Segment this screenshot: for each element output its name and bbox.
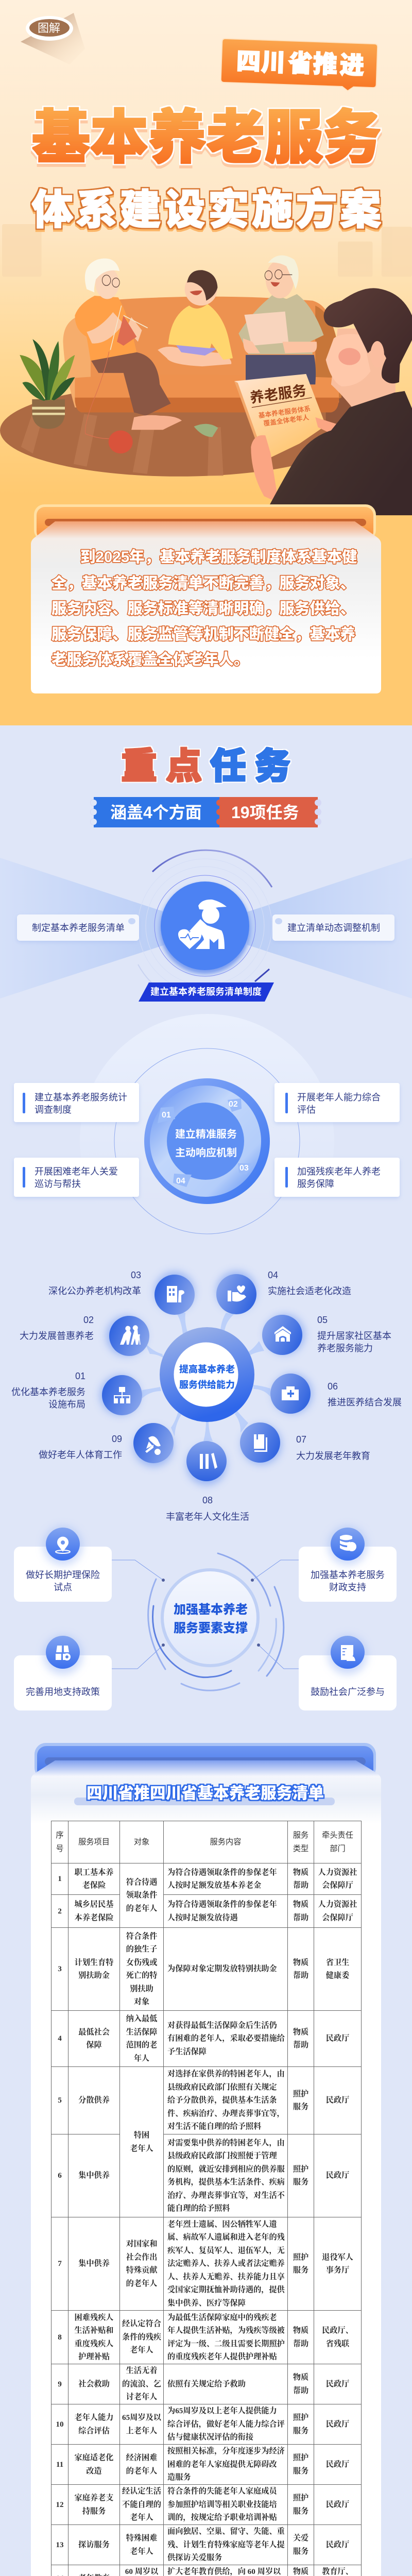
node 06: 推进医养结合发展 (328, 1397, 402, 1408)
table: 四川省基本养老服务清单: 人、扶养人无赡养、扶养能力且享 (167, 2273, 285, 2281)
node 05: 05 (317, 1315, 328, 1325)
rings (138, 850, 272, 993)
table: 四川省基本养老服务清单: 为符合待遇领取条件的参保老年 (167, 1868, 277, 1876)
table: 四川省基本养老服务清单: 对需要集中供养的特困老年人，由 (167, 2138, 285, 2147)
table: 四川省基本养老服务清单: 对生活不能自理的给予照料 (167, 2122, 261, 2131)
table: 四川省基本养老服务清单: 综合评估 (78, 2427, 110, 2435)
table: 四川省基本养老服务清单: 为最低生活保障家庭中的残疾老 (167, 2313, 277, 2321)
table: 四川省基本养老服务清单: 评定为一级、二级且需要长期照护 (167, 2339, 285, 2348)
table: 四川省基本养老服务清单: 特殊贡献 (126, 2266, 157, 2275)
table: 四川省基本养老服务清单: 民政厅 (326, 2540, 349, 2549)
node 01: 01 (75, 1371, 85, 1381)
grandmother (75, 259, 182, 438)
table: 四川省基本养老服务清单: 造服务 (167, 2473, 191, 2482)
table: 四川省基本养老服务清单: 范围的老 (126, 2041, 157, 2049)
card: 用地支持 (14, 1635, 112, 1710)
task card: 服务保障 (297, 1179, 334, 1189)
table: 四川省基本养老服务清单: 省残联 (326, 2339, 349, 2348)
table: 四川省基本养老服务清单: 物质 (293, 2326, 308, 2335)
node 05 (262, 1315, 391, 1355)
reader: man holding the booklet: 养老服务 (249, 382, 307, 406)
card: 财政支持: 财政支持 (329, 1582, 366, 1592)
table: 四川省基本养老服务清单: 服务 (293, 2266, 308, 2275)
paper (31, 521, 381, 693)
center circle (162, 1570, 258, 1666)
table: 四川省基本养老服务清单: 件、疾病治疗、办理丧葬事宜等， (167, 2109, 285, 2118)
table: 四川省基本养老服务清单: 照护 (293, 2494, 308, 2502)
panel frame (35, 1743, 376, 1779)
table: 四川省基本养老服务清单: 6 (58, 2171, 62, 2180)
table: 四川省基本养老服务清单: 对象 (134, 1838, 149, 1846)
table: 四川省基本养老服务清单: 为符合待遇领取条件的参保老年 (167, 1900, 277, 1909)
node 07: 07 (296, 1434, 306, 1445)
card: 长期护理保险 (14, 1526, 112, 1602)
table: 四川省基本养老服务清单: 物质 (293, 2567, 308, 2576)
endpoint dots (162, 1579, 260, 1647)
card: 社会参与: 鼓励社会广泛参与 (311, 1687, 385, 1697)
panel: goal statement (31, 504, 381, 693)
table: 四川省基本养老服务清单: 别扶助 (130, 1985, 153, 1993)
center circle: 服务要素支撑 (174, 1621, 248, 1635)
table: 四川省基本养老服务清单: 困难的老年人家庭提供无障碍改 (167, 2460, 277, 2469)
title: 基本养老服务: 基本养老服务 (32, 105, 381, 170)
table: 四川省基本养老服务清单: 疾军人、复员军人、退伍军人，无 (167, 2246, 285, 2255)
table: 四川省基本养老服务清单: 集中供养 (78, 2171, 110, 2180)
task card (274, 1083, 400, 1122)
table: 四川省基本养老服务清单: 65周岁及以 (122, 2413, 161, 2422)
task card (274, 1158, 400, 1197)
hub shadow (160, 884, 250, 974)
goal paragraph: 服务保障、服务监管等机制不断健全，基本养 (52, 625, 355, 643)
table: 四川省基本养老服务清单: 4 (58, 2034, 62, 2043)
table: 四川省基本养老服务清单: 10 (56, 2420, 64, 2429)
table: 四川省基本养老服务清单: 的流浪、乞 (122, 2380, 161, 2388)
right card: 建立清单动态调整机制 (287, 923, 380, 933)
table: 四川省基本养老服务清单: 服务 (293, 1831, 308, 1840)
table: 四川省基本养老服务清单: 老年烈士遗属、因公牺牲军人遗 (167, 2220, 277, 2229)
table: 四川省基本养老服务清单: 会保障厅 (322, 1881, 353, 1890)
wall squares (2, 224, 412, 277)
node 06 (270, 1374, 402, 1414)
task card: 巡访与帮扶 (35, 1179, 81, 1189)
node 02 (20, 1315, 149, 1356)
table: 四川省基本养老服务清单: 11 (56, 2460, 63, 2469)
task cards: 建立基本养老服务统计 (35, 1092, 127, 1103)
child (158, 270, 233, 366)
hero background (0, 0, 412, 725)
table: 四川省基本养老服务清单: 年人 (134, 2054, 149, 2063)
table: 四川省基本养老服务清单: 号 (56, 1844, 64, 1853)
center circle: 加强基本养老 (174, 1602, 248, 1617)
table: 四川省基本养老服务清单: 会保障厅 (322, 1913, 353, 1922)
table: 四川省基本养老服务清单: 城乡居民基 (75, 1900, 113, 1909)
table: 四川省基本养老服务清单: 符合条件 (126, 1932, 157, 1940)
table: 四川省基本养老服务清单: 物质 (293, 1868, 308, 1876)
table: 四川省基本养老服务清单: 讨老年人 (126, 2393, 157, 2401)
card: 用地支持: 完善用地支持政策 (26, 1687, 100, 1697)
table: 四川省基本养老服务清单: 受国家定期抚恤补助待遇的，提供 (167, 2285, 285, 2294)
table: 四川省基本养老服务清单: 有困难的老年人，采取必要措施给 (167, 2034, 285, 2043)
table: 四川省基本养老服务清单: 训的，按规定给予职业培训补贴 (167, 2513, 277, 2522)
outline circle (114, 1048, 300, 1234)
task card: 开展老年人能力综合 (297, 1092, 381, 1103)
table: 四川省基本养老服务清单: 省卫生 (326, 1958, 349, 1967)
table: 四川省基本养老服务清单: 综合评估，做好老年人能力综合评 (167, 2420, 285, 2429)
task card: 加强残疾老年人养老 (297, 1166, 381, 1177)
arcs (148, 1553, 284, 1690)
number tags: 04 (176, 1177, 185, 1185)
table: 四川省基本养老服务清单: 依照有关规定给予救助 (167, 2380, 246, 2388)
center hub (160, 1327, 254, 1422)
table: 四川省基本养老服务清单: 县级政府民政部门按照便于管理 (167, 2151, 277, 2160)
node 07: 大力发展老年教育 (296, 1451, 370, 1461)
table: 四川省基本养老服务清单: 家庭养老支 (75, 2494, 113, 2502)
table: 四川省基本养老服务清单: 按照相关标准，分年度逐步为经济 (167, 2447, 285, 2455)
logo: 图解 (21, 13, 85, 64)
label bar: 建立基本养老服务清单制度 (150, 986, 262, 997)
backdrop circle (80, 1014, 334, 1268)
table: 四川省基本养老服务清单: 照护 (293, 2090, 308, 2098)
node 01: 优化基本养老服务 (11, 1387, 85, 1397)
table: 四川省基本养老服务清单: 本养老保险 (75, 1913, 113, 1922)
diagram: 建立基本养老服务清单制度 (0, 850, 412, 1002)
connectors (142, 1313, 270, 1441)
node 07 (240, 1422, 370, 1463)
table: 四川省基本养老服务清单: 服务 (293, 2427, 308, 2435)
card: 财政支持: 加强基本养老服务 (311, 1570, 385, 1580)
table: 四川省基本养老服务清单: 属、病故军人遗属和进入老年的残 (167, 2233, 285, 2242)
card: 财政支持 (299, 1526, 397, 1602)
table: 四川省基本养老服务清单: 服务 (293, 2178, 308, 2187)
table: 四川省基本养老服务清单: 死亡的特 (126, 1971, 157, 1980)
table: 四川省基本养老服务清单: 符合条件的失能老年人家庭成员 (167, 2487, 277, 2496)
table: 四川省基本养老服务清单: 特困 (134, 2131, 149, 2140)
node 08: 丰富老年人文化生活 (166, 1512, 249, 1522)
node 08 (166, 1441, 249, 1522)
table: 四川省基本养老服务清单: 帮助 (293, 1913, 308, 1922)
table: 四川省基本养老服务清单: 民政厅 (326, 2460, 349, 2469)
table: 四川省基本养老服务清单: 特殊困难 (126, 2534, 157, 2543)
table: 四川省基本养老服务清单: 能自理的给予照料 (167, 2204, 230, 2213)
table: 四川省基本养老服务清单: 帮助 (293, 2386, 308, 2395)
task card: 开展困难老年人关爱 (35, 1166, 118, 1177)
table: 四川省基本养老服务清单: 人按时足额发放基本养老金 (167, 1881, 261, 1890)
card: 长期护理保险: 做好长期护理保险 (26, 1570, 100, 1580)
table: 四川省基本养老服务清单: 老年人 (130, 2547, 153, 2555)
subtitle: 体系建设实施方案: 体系建设实施方案 (32, 187, 381, 233)
heading: 重点任务: 任务 (210, 746, 290, 786)
table: 四川省基本养老服务清单: 社会作出 (126, 2252, 157, 2262)
table: 四川省基本养老服务清单: 服务 (293, 2547, 308, 2555)
disc (144, 1078, 270, 1204)
left card: 制定基本养老服务清单 (32, 923, 125, 933)
table: 四川省基本养老服务清单: 保障 (86, 2041, 102, 2049)
sofa (63, 297, 355, 427)
green slippers (194, 424, 218, 437)
table: 四川省基本养老服务清单: 民政厅 (326, 2500, 349, 2509)
card: 社会参与 (299, 1635, 397, 1710)
reader: man holding the booklet: 覆盖全体老年人 (263, 413, 310, 428)
table: 四川省基本养老服务清单: 牵头责任 (322, 1831, 353, 1840)
table: 四川省基本养老服务清单: 纳入最低 (126, 2014, 157, 2023)
table: 四川省基本养老服务清单: 服务 (293, 2467, 308, 2475)
hub circle with elder-care icon (161, 882, 249, 970)
node 04: 实施社会适老化改造 (268, 1286, 351, 1296)
table: 四川省基本养老服务清单: 家庭适老化 (75, 2453, 113, 2462)
section background (0, 725, 412, 2576)
table: 四川省基本养老服务清单: 老年人 (130, 2144, 153, 2153)
table: 四川省基本养老服务清单: 经认定符合 (122, 2319, 161, 2328)
connector lines (112, 1560, 299, 1669)
table: 四川省基本养老服务清单: 最低社会 (78, 2028, 110, 2036)
table: 四川省基本养老服务清单: 人力资源社 (318, 1868, 357, 1876)
table: 四川省基本养老服务清单: 女伤残或 (126, 1958, 157, 1967)
table: 四川省基本养老服务清单: 民政厅 (326, 2420, 349, 2429)
table: 四川省基本养老服务清单: 民政厅 (326, 2034, 349, 2043)
table: 四川省基本养老服务清单: 为保障对象定期发放特别扶助金 (167, 1964, 277, 1973)
number tags: 02 (229, 1100, 238, 1109)
table: 四川省基本养老服务清单: 老年人能力 (75, 2413, 113, 2422)
label bar (139, 982, 274, 1002)
table: 四川省基本养老服务清单: 序 (56, 1831, 64, 1840)
table: 四川省基本养老服务清单: 5 (58, 2096, 62, 2105)
list title: 四川省推四川省基本养老服务清单 (87, 1785, 324, 1802)
node 09: 09 (112, 1434, 122, 1444)
table: 四川省基本养老服务清单: 民政厅 (326, 2380, 349, 2388)
table: 四川省基本养老服务清单: 面向独居、空巢、留守、失能、重 (167, 2527, 285, 2536)
table: 四川省基本养老服务清单: 集中供养、医疗等保障 (167, 2299, 246, 2308)
table: 四川省基本养老服务清单: 服务内容 (210, 1838, 241, 1846)
table: 四川省基本养老服务清单: 探访服务 (78, 2540, 110, 2549)
rug (0, 384, 357, 477)
table: 四川省基本养老服务清单: 3 (58, 1964, 62, 1973)
reader: man holding the booklet (234, 288, 412, 515)
center hub: 服务供给能力 (179, 1379, 235, 1390)
table: 四川省基本养老服务清单: 老保险 (82, 1881, 106, 1890)
table: 四川省基本养老服务清单: 12 (56, 2500, 64, 2509)
node 03: 03 (131, 1270, 141, 1280)
table: 四川省基本养老服务清单: 残、计划生育特殊家庭等老年人提 (167, 2540, 285, 2549)
table: 四川省基本养老服务清单: 民政厅、 (322, 2326, 353, 2335)
panel frame (34, 504, 376, 540)
title bar (74, 1798, 335, 1805)
table: 四川省基本养老服务清单: 护理补贴 (78, 2352, 110, 2361)
table: 四川省基本养老服务清单: 重度残疾人 (75, 2339, 113, 2348)
table: 四川省基本养老服务清单: 关爱 (293, 2534, 308, 2543)
table: 四川省基本养老服务清单: 照护 (293, 2252, 308, 2262)
table: 四川省基本养老服务清单: 事务厅 (326, 2266, 349, 2275)
table: 四川省基本养老服务清单: 类型 (293, 1844, 308, 1853)
table: 四川省基本养老服务清单: 领取条件 (126, 1891, 157, 1900)
table: 四川省基本养老服务清单: 供探访关爱服务 (167, 2553, 222, 2562)
disc: 建立精准服务 (175, 1128, 237, 1140)
node 01: 设施布局 (48, 1399, 85, 1410)
table: 四川省基本养老服务清单: 帮助 (293, 1971, 308, 1980)
table: 四川省基本养老服务清单: 估与健康状况评估的衔接 (167, 2433, 253, 2442)
table: 四川省基本养老服务清单: 物质 (293, 2373, 308, 2382)
table: 四川省基本养老服务清单: 1 (58, 1874, 62, 1883)
table: 四川省基本养老服务清单 (51, 1821, 362, 2576)
table: 四川省基本养老服务清单: 退役军人 (322, 2252, 353, 2262)
goal paragraph: 服务内容、服务标准等清晰明确，服务供给、 (52, 600, 355, 617)
node 04: 04 (268, 1270, 278, 1280)
table: 四川省基本养老服务清单: 的独生子 (126, 1945, 157, 1954)
table: 四川省基本养老服务清单: 的老年人 (126, 2467, 157, 2475)
center hub: 提高基本养老 (179, 1364, 235, 1375)
node 01 (11, 1371, 142, 1415)
task cards: 调查制度 (35, 1105, 72, 1115)
disc: 主动响应机制 (175, 1146, 237, 1159)
table: 四川省基本养老服务清单: 的老年人 (126, 1904, 157, 1913)
table: 四川省基本养老服务清单: 的原则，就近安排到相应的供养服 (167, 2165, 285, 2173)
task cards (14, 1083, 139, 1122)
table: 四川省基本养老服务清单: 8 (58, 2333, 62, 2342)
table: 四川省基本养老服务清单: 服务项目 (78, 1838, 110, 1846)
left card (17, 914, 139, 941)
table: 四川省基本养老服务清单: 不能自理的 (122, 2500, 161, 2509)
paper (31, 1760, 381, 2576)
node 09: 做好老年人体育工作 (39, 1450, 122, 1460)
node 05: 养老服务能力 (317, 1343, 373, 1353)
table: 四川省基本养老服务清单: 务机构，提供基本生活条件、疾病 (167, 2178, 285, 2187)
logo: 图解: 图解 (38, 22, 60, 35)
table: 四川省基本养老服务清单: 对选择在家供养的特困老年人，由 (167, 2070, 285, 2078)
table: 四川省基本养老服务清单: 参加照护培训等相关职业技能培 (167, 2500, 277, 2509)
table: 四川省基本养老服务清单: 老年人 (130, 2346, 153, 2354)
table: 四川省基本养老服务清单: 生活无着 (126, 2366, 157, 2375)
table: 四川省基本养老服务清单: 职工基本养 (75, 1868, 113, 1876)
node 03: 深化公办养老机构改革 (48, 1286, 141, 1296)
table: 四川省基本养老服务清单: 7 (58, 2259, 62, 2268)
plant (20, 339, 75, 429)
table: 四川省基本养老服务清单: 计划生育特 (75, 1958, 113, 1967)
table: 四川省基本养老服务清单: 分散供养 (78, 2096, 110, 2105)
ribbon: 涵盖4个方面 19项任务: 19项任务 (231, 803, 299, 822)
goal paragraph: 到2025年，基本养老服务制度体系基本健 (80, 549, 357, 566)
heading: 重点任务: 重点 (121, 746, 202, 786)
table: 四川省基本养老服务清单: 老年人 (130, 2513, 153, 2522)
banner: 四川省推进 (220, 39, 377, 92)
task card: 评估 (297, 1105, 316, 1115)
table: 四川省基本养老服务清单: 9 (58, 2380, 62, 2388)
number tags: 01 (162, 1111, 171, 1120)
table: 四川省基本养老服务清单: 服务 (293, 2103, 308, 2111)
table: 四川省基本养老服务清单: 帮助 (293, 2339, 308, 2348)
table: 四川省基本养老服务清单: 经济困难 (126, 2453, 157, 2462)
node 02: 大力发展普惠养老 (20, 1331, 94, 1341)
table: 四川省基本养老服务清单: 物质 (293, 2028, 308, 2036)
node 02: 02 (83, 1315, 94, 1325)
table: 四川省基本养老服务清单: 县级政府民政部门依照有关规定 (167, 2083, 277, 2092)
table: 四川省基本养老服务清单: 照护 (293, 2413, 308, 2422)
goal paragraph: 全，基本养老服务清单不断完善，服务对象、 (52, 574, 355, 592)
table: 四川省基本养老服务清单: 的老年人 (126, 2279, 157, 2287)
diagram: 加强基本养老服务要素支撑 (14, 1526, 397, 1710)
table: 四川省基本养老服务清单: 予生活保障 (167, 2047, 207, 2056)
banner text: 四川省推进 (236, 47, 365, 79)
hero illustration: family on sofa (0, 224, 412, 515)
table: 四川省基本养老服务清单: 人按时足额发放待遇 (167, 1913, 238, 1922)
table: 四川省基本养老服务清单: 健康委 (326, 1971, 349, 1980)
table: 四川省基本养老服务清单: 教育厅、 (322, 2567, 353, 2576)
table: 四川省基本养老服务清单: 条件的残疾 (122, 2333, 161, 2342)
ribbon: 涵盖4个方面 19项任务: 涵盖4个方面 (110, 803, 202, 822)
panel: service list (31, 1743, 381, 2576)
grandfather (238, 256, 324, 384)
table: 四川省基本养老服务清单: 改造 (86, 2467, 102, 2475)
node 04 (216, 1270, 351, 1314)
table: 四川省基本养老服务清单: 服务 (293, 2507, 308, 2515)
table: 四川省基本养老服务清单: 13 (56, 2540, 64, 2549)
table: 四川省基本养老服务清单: 生活补贴和 (75, 2326, 113, 2335)
node 08: 08 (202, 1495, 213, 1505)
table: 四川省基本养老服务清单: 法定赡养人、扶养人或者法定赡养 (167, 2259, 285, 2268)
node 09 (39, 1423, 174, 1463)
task card (14, 1158, 139, 1197)
table: 四川省基本养老服务清单: 符合待遇 (126, 1878, 157, 1887)
goal paragraph (52, 549, 357, 668)
hero gradient sky (0, 0, 412, 495)
table: 四川省基本养老服务清单: 社会救助 (78, 2380, 110, 2388)
table: 四川省基本养老服务清单: 物质 (293, 1958, 308, 1967)
table: 四川省基本养老服务清单: 经认定生活 (122, 2487, 161, 2496)
table: 四川省基本养老服务清单: 帮助 (293, 2041, 308, 2049)
table: 四川省基本养老服务清单: 对获得最低生活保障金后生活仍 (167, 2021, 277, 2030)
ribbon: 涵盖4个方面 19项任务 (90, 797, 321, 827)
node 05: 提升居家社区基本 (317, 1331, 391, 1341)
table: 四川省基本养老服务清单: 60 周岁以 (125, 2567, 158, 2576)
diagram: 提高基本养老服务供给能力 (11, 1270, 402, 1522)
reader: man holding the booklet: 基本养老服务体系 (258, 404, 311, 419)
table: 四川省基本养老服务清单: 上老年人 (126, 2427, 157, 2435)
number tags: 03 (239, 1164, 249, 1173)
table: 四川省基本养老服务清单: 民政厅 (326, 2171, 349, 2180)
table: 四川省基本养老服务清单: 民政厅 (326, 2096, 349, 2105)
right card (272, 914, 394, 941)
table: 四川省基本养老服务清单: 为65周岁及以上老年人提供能力 (167, 2406, 277, 2415)
table: 四川省基本养老服务清单: 人力资源社 (318, 1900, 357, 1909)
table: 四川省基本养老服务清单: 对国家和 (126, 2240, 157, 2248)
ball of yarn (109, 431, 133, 453)
card: 长期护理保险: 试点 (54, 1582, 72, 1592)
glows (100, 1272, 312, 1485)
table: 四川省基本养老服务清单: 给予分散供养，提供基本生活条 (167, 2096, 277, 2105)
table: 四川省基本养老服务清单: 的重度残疾老年人提供护理补贴 (167, 2352, 277, 2361)
table: 四川省基本养老服务清单: 持服务 (82, 2507, 106, 2515)
table: 四川省基本养老服务清单: 部门 (330, 1844, 346, 1853)
node 06: 06 (328, 1381, 338, 1392)
node 03 (48, 1270, 195, 1315)
table: 四川省基本养老服务清单: 生活保障 (126, 2028, 157, 2036)
goal paragraph: 老服务体系覆盖全体老年人。 (52, 651, 249, 668)
number tags (158, 1098, 253, 1187)
table: 四川省基本养老服务清单: 照护 (293, 2165, 308, 2173)
table: 四川省基本养老服务清单: 年人提供生活补贴，为残疾等级被 (167, 2326, 285, 2335)
table: 四川省基本养老服务清单: 物质 (293, 1900, 308, 1909)
table: 四川省基本养老服务清单: 困难残疾人 (75, 2313, 113, 2321)
table: 四川省基本养老服务清单: 照护 (293, 2453, 308, 2462)
table: 四川省基本养老服务清单: 扩大老年教育供给，向 60 周岁以 (167, 2567, 281, 2576)
table: 四川省基本养老服务清单: 2 (58, 1907, 62, 1916)
table: 四川省基本养老服务清单: 别扶助金 (78, 1971, 110, 1980)
beams (0, 858, 412, 998)
diagram: 建立精准服务主动响应机制 (14, 1014, 400, 1268)
table: 四川省基本养老服务清单: 帮助 (293, 1881, 308, 1890)
table: 四川省基本养老服务清单: 治疗、办理丧葬事宜等，对生活不 (167, 2191, 285, 2200)
table: 四川省基本养老服务清单: 集中供养 (78, 2259, 110, 2268)
table: 四川省基本养老服务清单: 对象 (134, 1997, 149, 2006)
